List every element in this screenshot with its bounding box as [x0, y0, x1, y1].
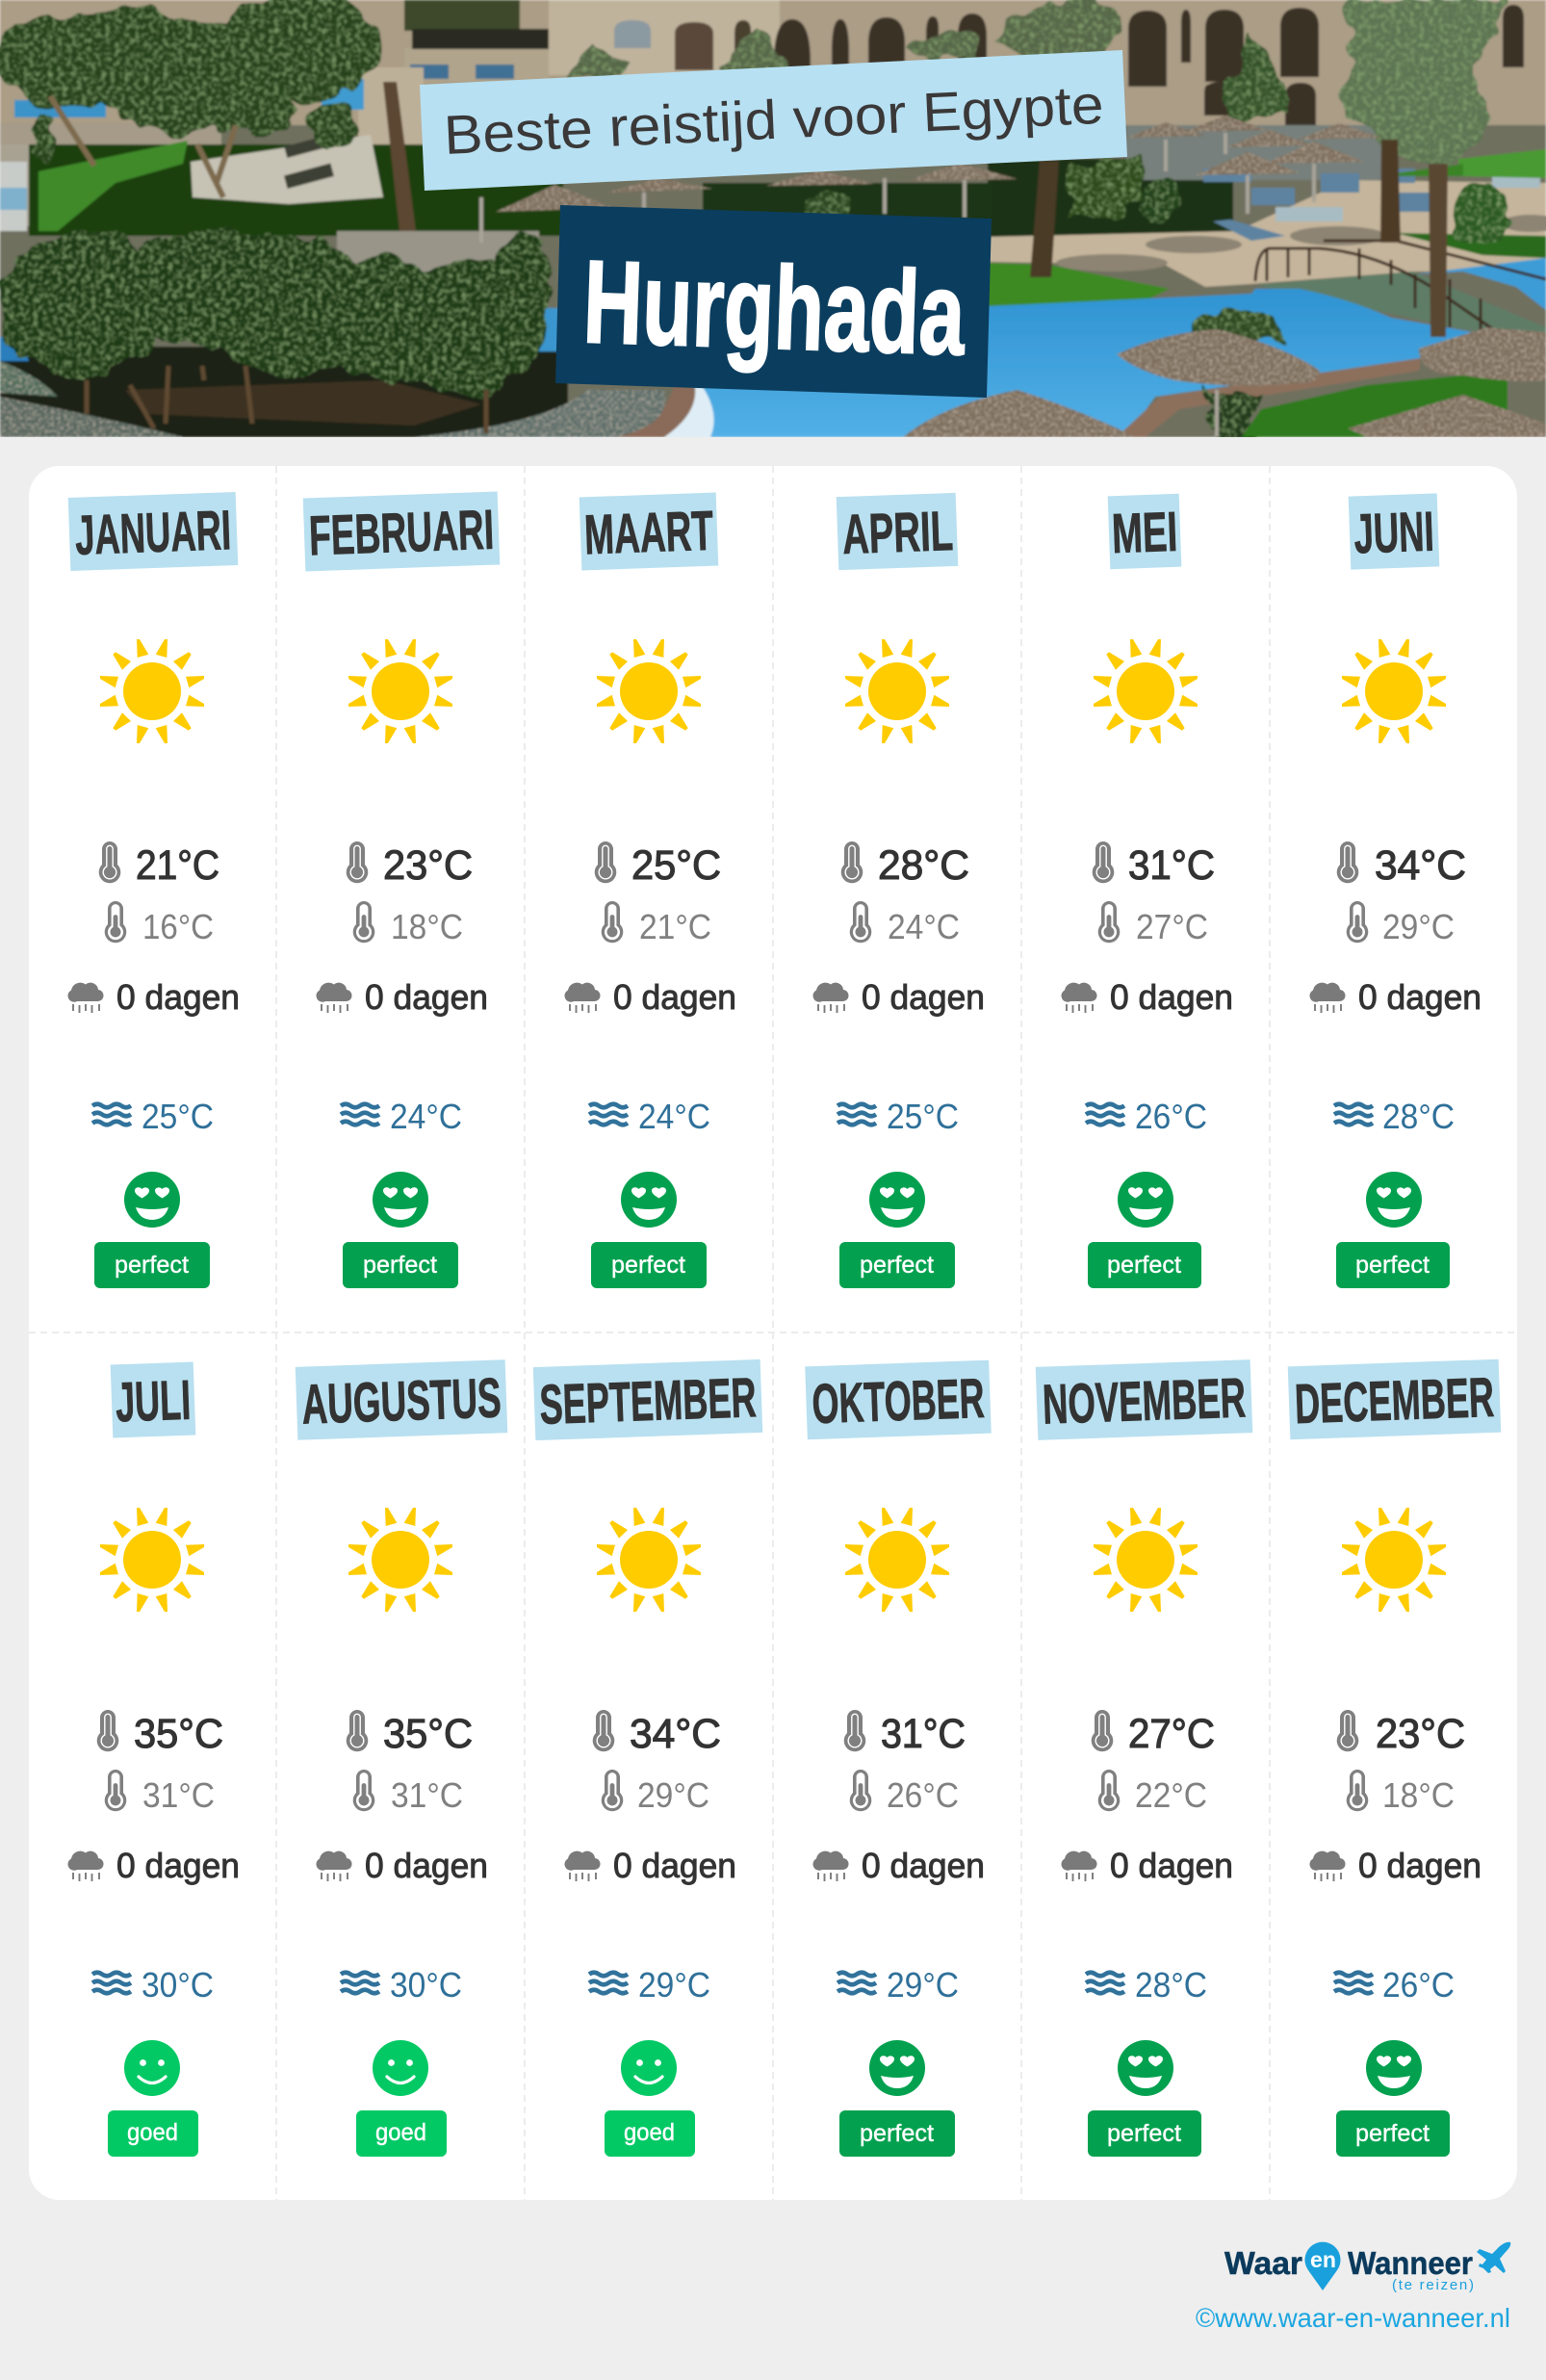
- low temperature: 29°C: [1382, 907, 1455, 946]
- icon: sun: [1342, 1508, 1446, 1612]
- high temperature: 35°C: [134, 1711, 223, 1757]
- panel: december: [1288, 1359, 1501, 2157]
- lawn: [29, 144, 563, 236]
- low temperature: 21°C: [639, 907, 711, 946]
- badge goed: [605, 2110, 695, 2157]
- low temperature: 29°C: [637, 1775, 709, 1815]
- month label: [296, 1359, 507, 1440]
- high temperature: [1092, 1710, 1215, 1757]
- icon: smiley perfect: [1366, 2040, 1422, 2096]
- sea temperature: 29°C: [638, 1965, 710, 2005]
- title text: Beste reistijd voor Egypte: [443, 74, 1105, 167]
- title banner: [420, 50, 1127, 191]
- month label: [533, 1359, 762, 1440]
- sun loungers: [1203, 168, 1431, 241]
- month label: [68, 492, 238, 571]
- icon: sun: [348, 1508, 452, 1612]
- sea temperature: [1086, 1965, 1207, 2005]
- lawn lower right: [1242, 371, 1507, 437]
- low temperature: [602, 901, 711, 946]
- badge perfect: [343, 1242, 458, 1288]
- rain days: 0 dagen: [1358, 977, 1482, 1017]
- badge perfect: perfect: [115, 1252, 189, 1279]
- logo tagline: (te reizen): [1392, 2277, 1474, 2293]
- month label: FEBRUARI: [308, 499, 495, 567]
- city name: Hurghada: [581, 236, 967, 379]
- icon: smiley perfect: [1118, 2040, 1173, 2096]
- badge perfect: perfect: [1107, 1252, 1181, 1279]
- badge goed: goed: [624, 2119, 675, 2146]
- badge perfect: perfect: [1355, 1252, 1430, 1279]
- badge perfect: perfect: [1355, 2120, 1430, 2147]
- high temperature: 34°C: [1375, 842, 1466, 889]
- badge goed: goed: [127, 2119, 178, 2146]
- low temperature: [1347, 1770, 1455, 1815]
- pool edge brick: [1117, 358, 1421, 437]
- icon: smiley perfect: [1118, 1172, 1173, 1228]
- sea temperature: 26°C: [1135, 1097, 1207, 1136]
- sea temperature: [1334, 1965, 1455, 2005]
- rain days: 0 dagen: [365, 977, 488, 1017]
- lawn patches right: [988, 263, 1170, 306]
- high temperature: [99, 841, 219, 889]
- high temperature: 23°C: [1376, 1711, 1465, 1757]
- thatched umbrellas: [496, 116, 1546, 437]
- back pools: [14, 100, 106, 117]
- low temperature: [1098, 901, 1208, 946]
- panel: augustus: [296, 1359, 507, 2157]
- low temperature: 22°C: [1135, 1775, 1207, 1815]
- badge perfect: [1336, 1242, 1450, 1288]
- panel: juli: [68, 1362, 240, 2157]
- rain days: 0 dagen: [613, 977, 736, 1017]
- icon: sun: [348, 639, 452, 743]
- high temperature: [97, 1710, 223, 1757]
- icon: sun: [597, 1508, 701, 1612]
- sea temperature: [837, 1965, 959, 2005]
- rain days: 0 dagen: [613, 1846, 736, 1885]
- top-left tree canopy: [0, 0, 380, 167]
- icon: smiley perfect: [869, 1172, 925, 1228]
- badge goed: goed: [375, 2119, 426, 2146]
- low temperature: 27°C: [1136, 907, 1208, 946]
- high temperature: [347, 1710, 473, 1757]
- high temperature: [841, 841, 969, 889]
- sea temperature: 24°C: [638, 1097, 710, 1136]
- rain days: 0 dagen: [1358, 1846, 1482, 1885]
- icon: sun: [100, 639, 204, 743]
- panel: januari: [68, 492, 240, 1288]
- low temperature: [105, 901, 214, 946]
- paved terrace right: [988, 180, 1546, 287]
- icon: sun: [1094, 639, 1198, 743]
- month label: JUNI: [1353, 501, 1435, 565]
- main pool: [691, 289, 1473, 437]
- sea temperature: 26°C: [1382, 1965, 1455, 2005]
- high temperature: 27°C: [1128, 1711, 1215, 1757]
- icon: smiley perfect: [1366, 1172, 1422, 1228]
- low temperature: 24°C: [888, 907, 960, 946]
- month label: [111, 1362, 195, 1437]
- month label: [303, 491, 500, 572]
- logo: Waar en Wanneer: [1224, 2242, 1510, 2293]
- badge perfect: perfect: [860, 1252, 934, 1279]
- bottom ground: [0, 347, 568, 437]
- month label: MEI: [1111, 501, 1178, 565]
- badge perfect: perfect: [860, 2120, 934, 2147]
- icon: sun: [1342, 639, 1446, 743]
- month label: [1349, 493, 1439, 570]
- palm fronds top: [565, 0, 1122, 77]
- rain days: 0 dagen: [1110, 1846, 1233, 1885]
- city banner: [555, 205, 992, 398]
- poles: [481, 133, 1314, 437]
- back bushes right: [988, 159, 1233, 238]
- high temperature: 31°C: [881, 1711, 966, 1757]
- high temperature: 35°C: [383, 1711, 473, 1757]
- month label: NOVEMBER: [1042, 1366, 1247, 1436]
- sea temperature: [1086, 1097, 1207, 1136]
- high temperature: [1337, 841, 1466, 889]
- rain days: 0 dagen: [116, 977, 240, 1017]
- sea temperature: [341, 1097, 462, 1136]
- month label: SEPTEMBER: [538, 1366, 758, 1436]
- sea temperature: 29°C: [887, 1965, 959, 2005]
- badge goed: [108, 2110, 198, 2157]
- icon: smiley good: [124, 2040, 180, 2096]
- high temperature: [595, 841, 721, 889]
- icon: map pin: [1305, 2242, 1341, 2290]
- month label: OKTOBER: [811, 1367, 986, 1436]
- panel: november: [1036, 1359, 1252, 2157]
- icon: sun: [845, 639, 949, 743]
- rain days: 0 dagen: [116, 1846, 240, 1885]
- low temperature: 26°C: [887, 1775, 959, 1815]
- panel: september: [533, 1359, 762, 2157]
- low temperature: [850, 901, 960, 946]
- right small pool: [1413, 258, 1546, 310]
- sea temperature: [837, 1097, 959, 1136]
- rain days: 0 dagen: [365, 1846, 488, 1885]
- tall cypress: [1224, 31, 1290, 117]
- hero photo: hotel resort with pool: [0, 0, 1546, 437]
- badge perfect: perfect: [363, 1252, 437, 1279]
- month label: APRIL: [841, 500, 954, 566]
- sea temperature: 25°C: [142, 1097, 214, 1136]
- sea temperature: 24°C: [390, 1097, 462, 1136]
- logo word: en: en: [1310, 2247, 1336, 2272]
- month label: AUGUSTUS: [300, 1366, 502, 1436]
- big palm: [1343, 0, 1507, 164]
- icon: sun: [1094, 1508, 1198, 1612]
- high temperature: 28°C: [878, 842, 969, 889]
- badge perfect: [1088, 2110, 1201, 2157]
- low temperature: [602, 1770, 709, 1815]
- low temperature: 31°C: [391, 1775, 463, 1815]
- icon: smiley good: [373, 2040, 428, 2096]
- sea temperature: [589, 1097, 710, 1136]
- sea temperature: 30°C: [390, 1965, 462, 2005]
- icon: smiley good: [621, 2040, 677, 2096]
- badge perfect: [839, 2110, 955, 2157]
- month label: [805, 1360, 992, 1439]
- sea temperature: 25°C: [887, 1097, 959, 1136]
- icon: smiley perfect: [621, 1172, 677, 1228]
- high temperature: [1337, 1710, 1465, 1757]
- logo word: Wanneer: Wanneer: [1348, 2245, 1473, 2281]
- pavement mid: [356, 65, 425, 146]
- blue gaps: [0, 337, 29, 361]
- low temperature: [353, 901, 463, 946]
- panel: mei: [1062, 494, 1233, 1288]
- icon: sun: [845, 1508, 949, 1612]
- icon: sun: [100, 1508, 204, 1612]
- high temperature: [844, 1710, 966, 1757]
- sea temperature: [589, 1965, 710, 2005]
- month label: [1036, 1359, 1252, 1440]
- panel: februari: [303, 491, 500, 1288]
- badge perfect: perfect: [1107, 2120, 1181, 2147]
- high temperature: [1093, 841, 1215, 889]
- month label: [837, 493, 958, 570]
- high temperature: 25°C: [631, 842, 721, 889]
- high temperature: [347, 841, 473, 889]
- bridge deck: [1261, 272, 1546, 331]
- icon: airplane: [1477, 2242, 1510, 2273]
- sea temperature: [341, 1965, 462, 2005]
- badge goed: [356, 2110, 447, 2157]
- month label: JANUARI: [74, 499, 232, 567]
- high temperature: [593, 1710, 721, 1757]
- badge perfect: perfect: [611, 1252, 685, 1279]
- low temperature: [105, 1770, 215, 1815]
- badge perfect: [591, 1242, 707, 1288]
- front trees: [0, 229, 552, 395]
- icon: sun: [597, 639, 701, 743]
- low temperature: [1347, 901, 1455, 946]
- rain days: 0 dagen: [862, 1846, 985, 1885]
- rain days: 0 dagen: [862, 977, 985, 1017]
- month label: MAART: [583, 500, 714, 566]
- sea temperature: 30°C: [142, 1965, 214, 2005]
- low temperature: [353, 1770, 463, 1815]
- badge perfect: [94, 1242, 210, 1288]
- sea temperature: [92, 1097, 214, 1136]
- sea temperature: [1334, 1097, 1455, 1136]
- panel: calendar card: [29, 466, 1517, 2200]
- rain days: 0 dagen: [1110, 977, 1233, 1017]
- month label: [1108, 494, 1181, 569]
- icon: smiley perfect: [373, 1172, 428, 1228]
- source url: ©www.waar-en-wanneer.nl: [1196, 2303, 1510, 2333]
- logo word: Waar: Waar: [1224, 2245, 1302, 2281]
- pool shrub: [1194, 306, 1282, 437]
- low temperature: [1098, 1770, 1207, 1815]
- panel: juni: [1310, 493, 1482, 1288]
- high temperature: 31°C: [1128, 842, 1215, 889]
- badge perfect: [1088, 1242, 1201, 1288]
- panel: april: [813, 493, 985, 1288]
- panel: maart: [565, 493, 736, 1288]
- sea temperature: 28°C: [1382, 1097, 1455, 1136]
- low temperature: 18°C: [1382, 1775, 1455, 1815]
- bush right: [1454, 185, 1511, 243]
- icon: smiley perfect: [869, 2040, 925, 2096]
- sea temperature: [92, 1965, 214, 2005]
- low temperature: [850, 1770, 959, 1815]
- high temperature: 23°C: [383, 842, 473, 889]
- low temperature: 16°C: [142, 907, 214, 946]
- month label: JULI: [115, 1369, 192, 1434]
- icon: smiley perfect: [124, 1172, 180, 1228]
- low temperature: 18°C: [391, 907, 463, 946]
- high temperature: 34°C: [630, 1711, 721, 1757]
- high temperature: 21°C: [136, 842, 219, 889]
- sea temperature: 28°C: [1135, 1965, 1207, 2005]
- low temperature: 31°C: [142, 1775, 215, 1815]
- month label: [580, 493, 718, 570]
- badge perfect: [839, 1242, 955, 1288]
- badge perfect: [1336, 2110, 1450, 2157]
- panel: oktober: [805, 1360, 992, 2157]
